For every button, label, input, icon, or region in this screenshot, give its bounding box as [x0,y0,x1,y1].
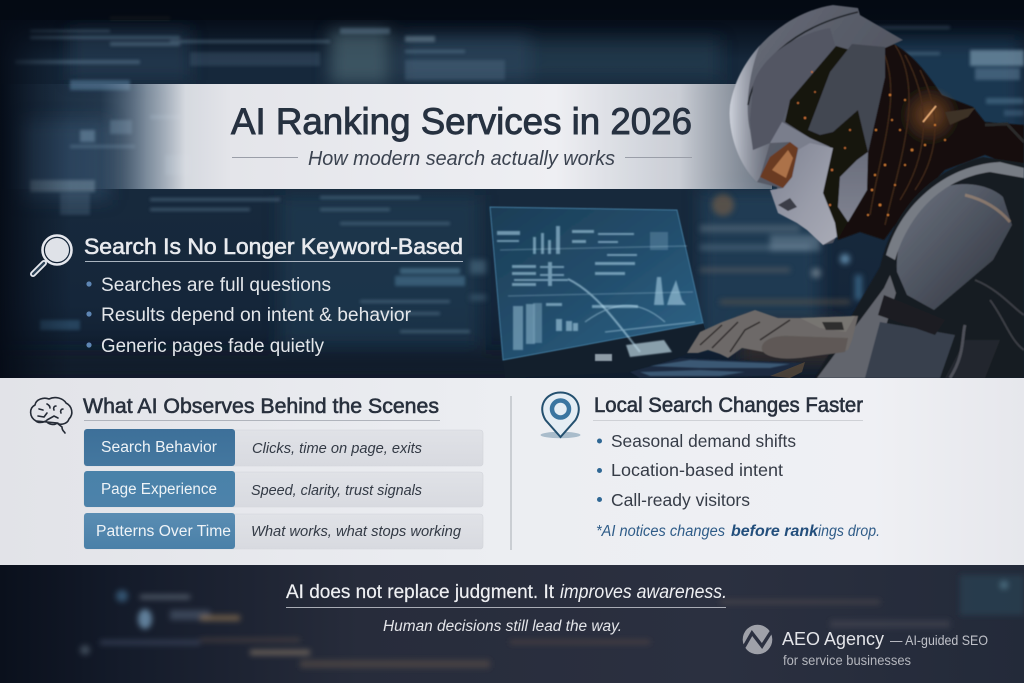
bottom footer background [0,565,1024,683]
heading: Local Search Changes Faster [594,394,863,417]
bullet list: Seasonal demand shifts [611,431,796,451]
row: patterns over time [84,513,483,549]
bullet list: Searches are full questions [101,275,331,296]
footnote: ings drop. [818,523,880,540]
icon: location pin [540,392,580,438]
footnote [596,523,880,540]
closing statement: improves awareness. [560,582,727,603]
section: search is no longer keyword-based [33,234,463,357]
icon: brain [31,398,72,433]
row: search behavior [84,429,483,466]
arm plates [817,275,896,378]
robot figure [687,5,1024,378]
face [770,143,837,245]
logo: AEO Agency: — AI-guided SEO [890,632,988,648]
dark cavity with circuitry [785,46,885,240]
inner helmet plate [750,28,836,150]
row: page experience [84,471,483,507]
row: search behavior: Search Behavior [101,439,217,456]
bullet list: Call-ready visitors [611,490,750,510]
bullet list [597,431,796,510]
side plate [808,44,885,152]
robotic hand [687,310,858,359]
shoulder armor [815,157,1024,378]
brow band [770,122,830,150]
row: search behavior: Clicks, time on page, exits [252,440,422,457]
wires and glowing circuitry [838,40,1024,240]
visor eye glow [760,142,798,188]
subtitle with rules: How modern search actually works [308,148,615,170]
lower white panel [0,378,1024,565]
panel: local search [540,392,880,540]
icon: logo mark [743,625,772,654]
bullet list: Generic pages fade quietly [101,336,324,357]
closing statement: Human decisions still lead the way. [383,618,622,635]
row: patterns over time: Patterns Over Time [96,523,231,540]
title heading: AI Ranking Services in 2026 [231,101,692,142]
logo: AEO Agency [743,625,988,668]
laptop with glowing dashboard [490,207,805,378]
logo: AEO Agency: for service businesses [783,653,911,668]
row: patterns over time: What works, what stops working [251,523,462,540]
heading: What AI Observes Behind the Scenes [83,394,439,418]
row: page experience: Speed, clarity, trust signals [251,482,422,499]
icon: magnifying glass [33,236,72,274]
footnote: *AI notices changes [596,523,725,540]
closing statement: AI does not replace judgment. It [286,582,555,603]
closing statement [286,582,727,635]
bullet list [86,275,412,357]
bullet list: Results depend on intent & behavior [101,305,412,326]
panel: what AI observes [31,394,483,549]
lower cheek plate [838,152,868,222]
bullet list: Location-based intent [611,460,783,480]
background: blurred data screens [0,0,1024,380]
logo: AEO Agency: AEO Agency [782,629,884,649]
row: page experience: Page Experience [101,481,217,498]
section heading: Search Is No Longer Keyword-Based [84,234,463,259]
helmet dome [730,5,903,245]
title banner [0,84,772,189]
footnote: before rank [731,523,819,540]
